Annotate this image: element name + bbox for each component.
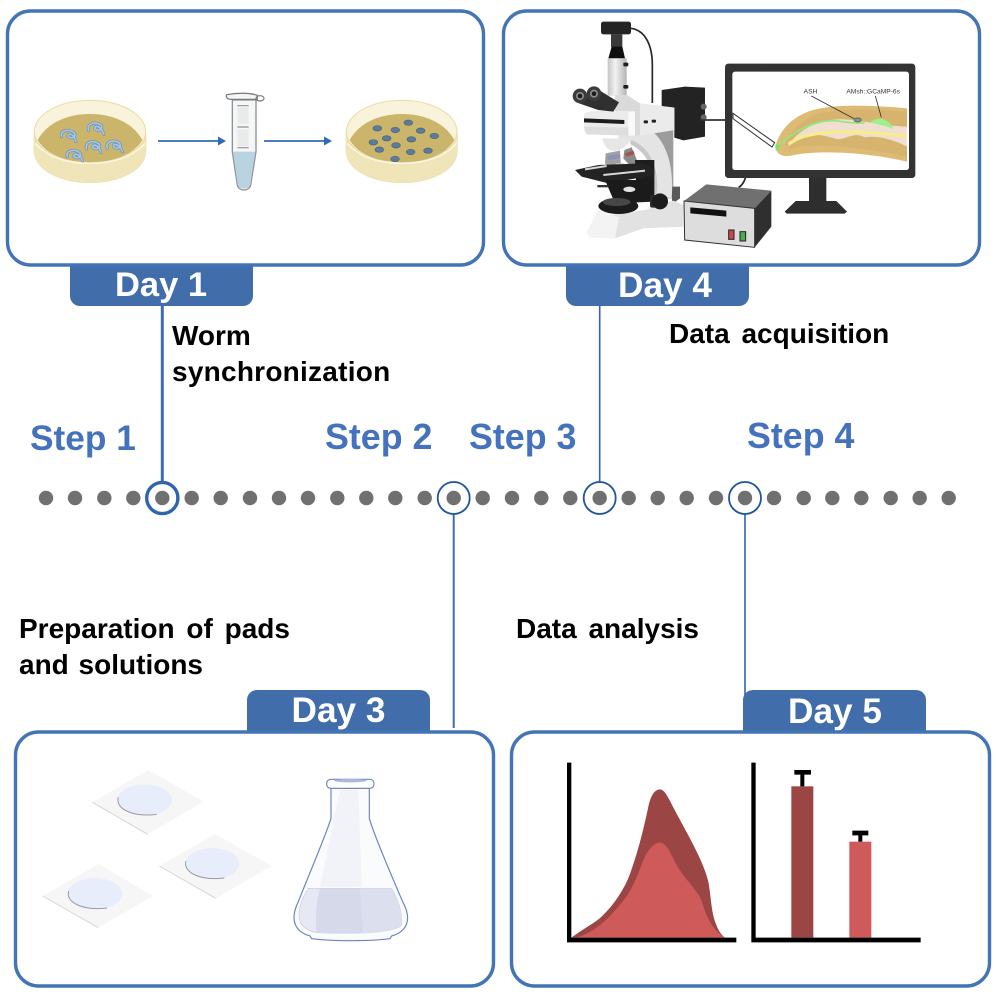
tab: day 5: Day 5: [788, 692, 882, 731]
step markers: [147, 482, 761, 514]
text: preparation of pads and solutions: Preparation of pads: [19, 613, 290, 644]
tab: day 3: Day 3: [292, 691, 385, 730]
tab: day 1: Day 1: [115, 266, 207, 304]
text: worm synchronization: Worm: [172, 320, 251, 351]
panel frame: day 3: [16, 732, 494, 986]
icon: agarose pads: [43, 770, 272, 928]
heading: Step 1: Step 1: [30, 419, 136, 458]
panel: day 1: [8, 11, 484, 306]
tab: day 3: [247, 690, 430, 736]
cable from side box to monitor: [700, 119, 731, 121]
tab: day 1: [70, 262, 253, 306]
heading: Step 4: Step 4: [747, 416, 855, 456]
connector lines: [162, 304, 745, 728]
microscope upper body: [573, 22, 707, 140]
text: data analysis: Data analysis: [516, 613, 699, 644]
arrow: tube to dish: [264, 136, 332, 146]
chart: overlapping area curves: [567, 763, 736, 942]
panel: day 4: [504, 11, 980, 306]
icon: petri dish with worms: [34, 100, 146, 183]
icon: petri dish with eggs: [346, 100, 457, 183]
icon: erlenmeyer flask: [294, 779, 408, 941]
panel: day 3: [16, 690, 494, 986]
tab: day 4: [566, 262, 749, 306]
icon: monitor showing worm head: AMsh::GCaMP-6s: [846, 89, 901, 96]
icon: controller box: [684, 172, 771, 247]
microscope lower body: [575, 128, 683, 238]
tab: day 5: [743, 690, 926, 736]
icon: microscope: [573, 22, 731, 238]
icon: monitor showing worm head: ASH: [804, 89, 818, 96]
tab: day 4: Day 4: [618, 266, 712, 305]
icon: microcentrifuge tube: [226, 93, 264, 190]
icon: monitor showing worm head: [725, 64, 915, 214]
timeline dots: [39, 491, 956, 505]
panel frame: day 5: [512, 732, 990, 986]
arrow: dish to tube: [158, 136, 226, 146]
panel: day 5: [512, 690, 990, 986]
text: worm synchronization: synchronization: [172, 356, 390, 387]
chart: bar chart with error bars: [751, 763, 921, 942]
panel frame: day 1: [8, 11, 484, 265]
text: preparation of pads and solutions: and solutions: [19, 649, 203, 680]
heading: Step 2: Step 2: [325, 417, 432, 457]
panel frame: day 4: [504, 11, 980, 265]
text: data acquisition: Data acquisition: [669, 318, 889, 349]
heading: Step 3: Step 3: [469, 417, 576, 457]
